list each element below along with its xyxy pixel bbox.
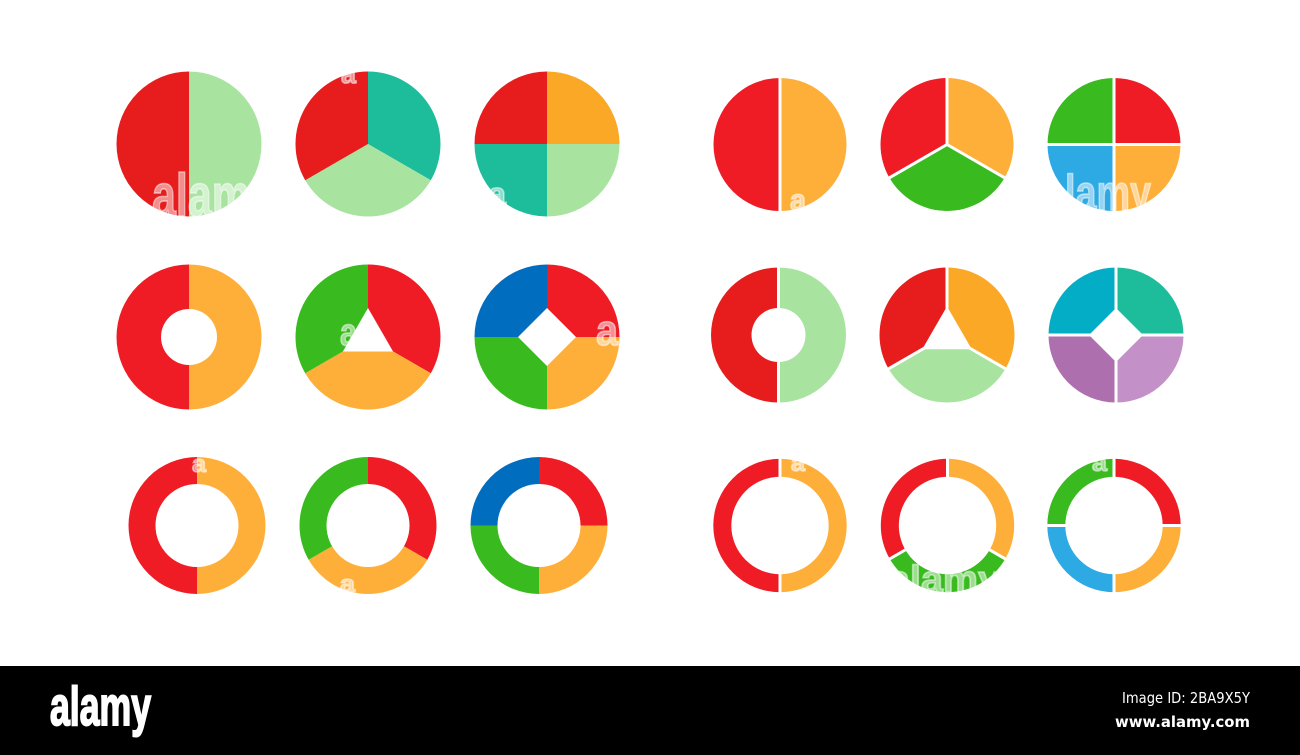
ring: four segments: [470, 457, 608, 594]
pie: four separated segments: [1046, 77, 1182, 212]
watermark text overlaid on the charts: a: [341, 59, 357, 89]
watermark text overlaid on the charts: alamy: [888, 559, 1000, 601]
pie: two separated segments, red and orange: [714, 77, 846, 212]
pie: two segments, red and light green: [116, 72, 262, 216]
panel: right chart set with white gaps: [711, 77, 1185, 594]
ring: three separated segments: [881, 457, 1014, 592]
pie: three segments, red, teal, light green: [296, 72, 440, 216]
watermark text overlaid on the charts: lamy: [1065, 165, 1151, 221]
website address: www.alamy.com: [1115, 713, 1250, 731]
ring: four separated segments: [1046, 457, 1182, 594]
footer logo: alamy: [50, 675, 151, 737]
pie: three separated segments with triangular hole: [880, 266, 1014, 402]
ring: two segments: [128, 457, 266, 594]
watermark text overlaid on the charts: alamy: [152, 162, 274, 229]
watermark text overlaid on the charts: a: [790, 184, 806, 217]
donut: two segments with small round hole: [116, 264, 262, 410]
pie: four separated segments with diamond hole: [1047, 266, 1185, 404]
image id: Image ID: 2BA9X5Y: [1122, 689, 1251, 707]
watermark text overlaid on the charts: [152, 59, 1151, 601]
watermark text overlaid on the charts: a: [192, 451, 207, 478]
watermark text overlaid on the charts: a: [1092, 450, 1108, 477]
ring: two separated segments: [713, 457, 847, 594]
pie: four segments, red, orange, teal, light green: [474, 72, 620, 216]
watermark text overlaid on the charts: a: [488, 176, 506, 212]
watermark text overlaid on the charts: a: [340, 312, 358, 354]
pie: three separated segments: [881, 77, 1013, 211]
ring: three segments: [300, 457, 436, 594]
donut: two separated segments with round hole: [711, 266, 846, 404]
footer bar: [0, 666, 1300, 755]
watermark text overlaid on the charts: a: [340, 571, 356, 598]
watermark text overlaid on the charts: a: [791, 450, 806, 477]
panel: left chart set without gaps: [116, 72, 620, 594]
pie: four segments with diamond hole: [474, 264, 620, 410]
pie: three segments with triangular hole: [296, 264, 440, 409]
watermark text overlaid on the charts: a: [596, 306, 618, 355]
